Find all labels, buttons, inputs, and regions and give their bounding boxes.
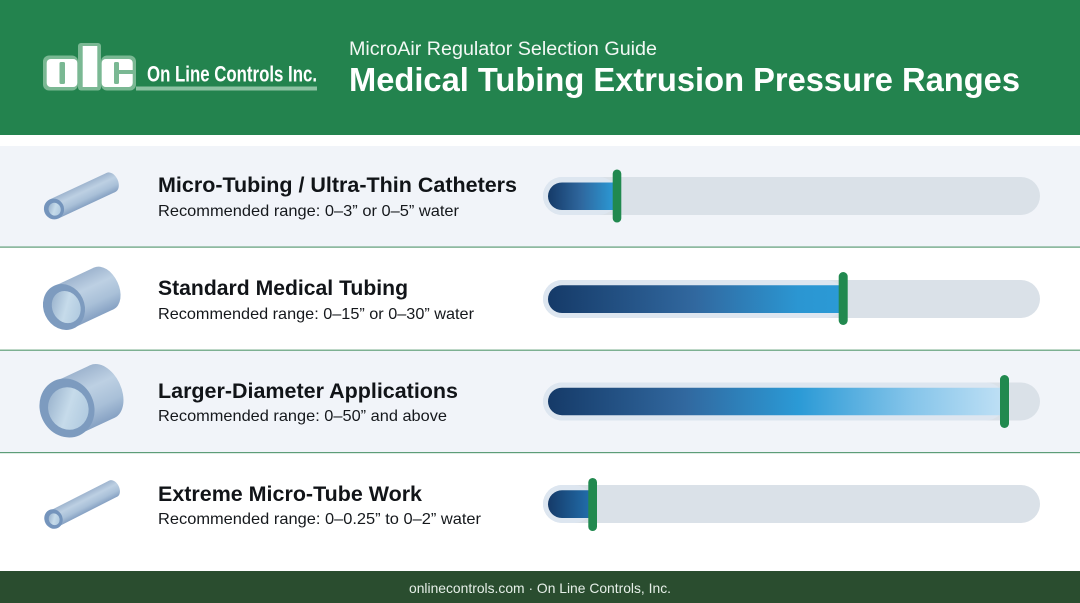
logo: olc On Line Controls Inc.: On Line Controls Inc. bbox=[147, 62, 317, 86]
panel: extreme micro-tube row bbox=[0, 454, 1080, 571]
gauge: standard tubing bbox=[543, 272, 1040, 325]
text: larger-diameter range: Recommended range: 0–50” and above bbox=[158, 408, 447, 425]
panel: standard tubing row bbox=[0, 248, 1080, 351]
icon: medium tube bbox=[35, 261, 127, 337]
heading: extreme micro-tube work: Extreme Micro-Tube Work bbox=[158, 483, 422, 506]
main title: Medical Tubing Extrusion Pressure Ranges bbox=[349, 61, 1020, 98]
logo: olc On Line Controls Inc. bbox=[43, 43, 317, 90]
text: extreme micro-tube range: Recommended range: 0–0.25” to 0–2” water bbox=[158, 511, 482, 528]
icon: thin tube small bbox=[41, 477, 123, 532]
icon: large tube bbox=[30, 356, 132, 447]
panel: micro-tubing row bbox=[0, 146, 1080, 248]
gauge: larger-diameter bbox=[543, 375, 1040, 428]
heading: standard medical tubing: Standard Medical Tubing bbox=[158, 277, 408, 300]
text: micro-tubing range: Recommended range: 0–3” or 0–5” water bbox=[158, 203, 460, 220]
footer: onlinecontrols.com · On Line Controls, Inc. bbox=[409, 580, 671, 596]
icon: thin tube bbox=[40, 170, 122, 223]
panel: larger-diameter row bbox=[0, 351, 1080, 453]
header band bbox=[0, 0, 1080, 135]
heading: larger-diameter applications: Larger-Diameter Applications bbox=[158, 380, 458, 403]
footer bbox=[0, 571, 1080, 603]
text: standard tubing range: Recommended range: 0–15” or 0–30” water bbox=[158, 306, 475, 323]
heading: micro-tubing: Micro-Tubing / Ultra-Thin Catheters bbox=[158, 174, 517, 197]
gauge: micro-tubing bbox=[543, 170, 1040, 222]
gauge: extreme micro-tube bbox=[543, 478, 1040, 531]
header subtitle: MicroAir Regulator Selection Guide bbox=[349, 39, 657, 60]
